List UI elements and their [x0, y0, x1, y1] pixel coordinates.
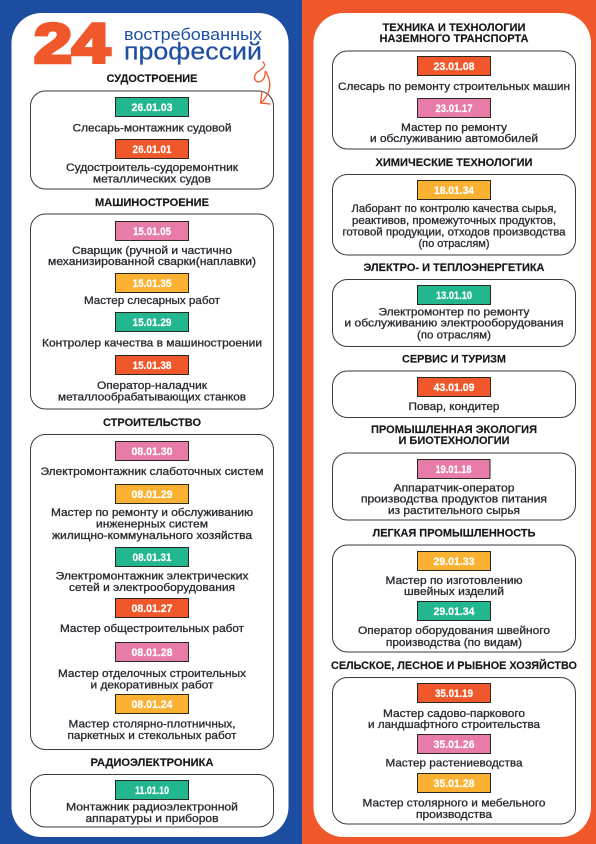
- profession: [66, 162, 238, 186]
- profession: Судостроитель-судоремонтник: [66, 162, 238, 174]
- profession: сетей и электрооборудования: [69, 582, 235, 594]
- profession: [368, 708, 540, 731]
- profession: и обслуживанию автомобилей: [370, 133, 538, 145]
- heading: ecology and biotechnology: [371, 424, 537, 447]
- code 18.01.34: 18.01.34: [434, 185, 475, 197]
- profession: Сварщик (ручной и частично: [72, 245, 232, 257]
- panel: agriculture, forestry and fisheries: [332, 678, 576, 824]
- code 29.01.34: 29.01.34: [434, 606, 475, 618]
- profession: механизированной сварки(наплавки): [48, 256, 256, 268]
- code 35.01.26: [418, 734, 490, 754]
- title line 2: профессий: [124, 38, 262, 66]
- heading: chemical technologies: ХИМИЧЕСКИЕ ТЕХНОЛОГИИ: [376, 157, 533, 169]
- profession: Мастер по ремонту: [401, 122, 508, 134]
- code 35.01.28: [418, 774, 490, 792]
- code 23.01.17: 23.01.17: [436, 103, 472, 115]
- profession: [66, 802, 238, 825]
- profession: Мастер садово-паркового: [383, 708, 525, 720]
- profession: металлических судов: [93, 174, 211, 186]
- profession: и декоративных работ: [90, 680, 214, 692]
- profession: Слесарь-монтажник судовой: [72, 122, 232, 134]
- code 15.01.05: [116, 222, 188, 240]
- code 11.01.10: 11.01.10: [135, 785, 169, 797]
- heading: construction: СТРОИТЕЛЬСТВО: [103, 417, 201, 429]
- code 35.01.26: 35.01.26: [434, 739, 474, 751]
- code 26.01.03: [116, 98, 188, 116]
- profession: [58, 380, 246, 404]
- code 13.01.10: 13.01.10: [436, 290, 472, 302]
- heading: light industry: ЛЕГКАЯ ПРОМЫШЛЕННОСТЬ: [372, 528, 536, 540]
- profession: Мастер растениеводства: [386, 758, 522, 770]
- code 26.01.01: 26.01.01: [132, 144, 172, 156]
- profession: [48, 245, 256, 268]
- code 23.01.17: [418, 98, 490, 118]
- code 15.01.35: 15.01.35: [132, 278, 172, 290]
- profession: [370, 122, 538, 145]
- code 13.01.10: [418, 286, 490, 304]
- code 08.01.27: [116, 598, 188, 618]
- icon: curly arrow: [255, 62, 270, 104]
- title: [34, 11, 263, 74]
- profession: Мастер по ремонту и обслуживанию: [51, 507, 253, 519]
- code 35.01.28: 35.01.28: [434, 778, 474, 790]
- code 08.01.29: [116, 484, 188, 504]
- code 08.01.27: 08.01.27: [132, 603, 172, 615]
- profession: Мастер общестроительных работ: [60, 623, 244, 635]
- profession: Оператор-наладчик: [97, 380, 207, 392]
- profession: производства: [416, 809, 492, 821]
- panel: shipbuilding: [30, 91, 274, 189]
- profession: инженерных систем: [96, 518, 208, 530]
- code 19.01.18: [418, 460, 490, 478]
- code 35.01.19: 35.01.19: [435, 688, 473, 700]
- heading: shipbuilding: СУДОСТРОЕНИЕ: [106, 73, 198, 85]
- code 08.01.31: [116, 548, 188, 566]
- panel: machine building: [30, 214, 274, 409]
- code 26.01.01: [116, 140, 188, 158]
- profession: готовой продукции, отходов производства: [342, 226, 566, 238]
- profession: реактивов, промежуточных продуктов,: [352, 215, 556, 227]
- code 08.01.24: [116, 694, 188, 714]
- code 15.01.38: 15.01.38: [132, 360, 172, 372]
- heading: ground transport: [380, 22, 529, 45]
- profession: Электромонтажник слаботочных систем: [40, 466, 264, 478]
- profession: Мастер по изготовлению: [386, 575, 522, 587]
- profession: Слесарь по ремонту строительных машин: [338, 81, 570, 93]
- profession: [51, 507, 253, 542]
- code 15.01.35: [116, 274, 188, 292]
- profession: [342, 203, 566, 250]
- code 08.01.28: 08.01.28: [132, 647, 172, 659]
- panel: radioelectronics: [30, 774, 274, 827]
- code 43.01.09: [418, 378, 490, 396]
- code 29.01.33: 29.01.33: [434, 556, 474, 568]
- heading: ecology and biotechnology: ПРОМЫШЛЕННАЯ ЭКОЛОГИЯ: [371, 424, 537, 436]
- panel: chemical technologies: [332, 174, 576, 255]
- profession: металлообрабатывающих станков: [58, 392, 246, 404]
- code 08.01.30: [116, 442, 188, 460]
- heading: ground transport: НАЗЕМНОГО ТРАНСПОРТА: [380, 33, 529, 45]
- profession: [361, 482, 547, 517]
- panel: ecology and biotechnology: [332, 453, 576, 520]
- profession: жилищно-коммунального хозяйства: [52, 530, 252, 542]
- profession: Лаборант по контролю качества сырья,: [352, 203, 556, 215]
- profession: Оператор оборудования швейного: [358, 625, 550, 637]
- profession: (по отраслям): [417, 330, 491, 342]
- panel: left column: [12, 11, 288, 837]
- profession: Мастер отделочных строительных: [58, 668, 247, 680]
- code 19.01.18: 19.01.18: [436, 464, 472, 476]
- profession: Мастер слесарных работ: [84, 295, 220, 307]
- profession: Электромонтер по ремонту: [378, 306, 530, 318]
- profession: [68, 718, 237, 742]
- code 35.01.19: [418, 684, 490, 702]
- profession: (по отраслям): [418, 238, 490, 250]
- panel: light industry: [332, 545, 576, 652]
- code 23.01.08: 23.01.08: [434, 61, 474, 73]
- profession: [344, 306, 564, 342]
- profession: Электромонтажник электрических: [56, 570, 249, 582]
- profession: производства (по видам): [386, 637, 522, 649]
- panel: right column: [314, 13, 591, 837]
- code 15.01.38: [116, 356, 188, 374]
- code 15.01.29: [116, 312, 188, 332]
- profession: [58, 668, 247, 692]
- code 15.01.29: 15.01.29: [132, 317, 172, 329]
- panel: service and tourism: [332, 371, 576, 418]
- profession: паркетных и стекольных работ: [68, 730, 237, 742]
- title line 1: востребованных: [124, 25, 263, 44]
- profession: и ландшафтного строительства: [368, 719, 540, 731]
- code 29.01.34: [418, 602, 490, 620]
- profession: из растительного сырья: [388, 505, 520, 517]
- heading: ground transport: ТЕХНИКА И ТЕХНОЛОГИИ: [382, 22, 526, 34]
- profession: производства продуктов питания: [361, 494, 547, 506]
- code 29.01.33: [418, 552, 490, 570]
- code 43.01.09: 43.01.09: [434, 382, 474, 394]
- code 26.01.03: 26.01.03: [132, 102, 172, 114]
- code 18.01.34: [418, 180, 490, 200]
- profession: [56, 570, 249, 594]
- code 08.01.28: [116, 642, 188, 662]
- profession: Повар, кондитер: [408, 401, 500, 413]
- panel: ground transport: [332, 51, 576, 149]
- profession: и обслуживанию электрооборудования: [344, 318, 564, 330]
- profession: аппаратуры и приборов: [86, 813, 219, 825]
- profession: [358, 625, 550, 649]
- heading: power engineering: ЭЛЕКТРО- И ТЕПЛОЭНЕРГЕТИКА: [364, 262, 545, 274]
- heading: agriculture, forestry and fisheries: СЕЛЬСКОЕ, ЛЕСНОЕ И РЫБНОЕ ХОЗЯЙСТВО: [331, 659, 577, 672]
- panel: construction: [30, 434, 274, 750]
- title number 24: 24: [34, 11, 110, 74]
- heading: radioelectronics: РАДИОЭЛЕКТРОНИКА: [90, 757, 214, 769]
- profession: Аппаратчик-оператор: [394, 482, 514, 494]
- code 08.01.31: 08.01.31: [132, 552, 172, 564]
- heading: service and tourism: СЕРВИС И ТУРИЗМ: [402, 354, 506, 366]
- profession: швейных изделий: [404, 586, 504, 598]
- heading: ecology and biotechnology: И БИОТЕХНОЛОГИИ: [398, 435, 510, 447]
- profession: Монтажник радиоэлектронной: [66, 802, 238, 814]
- code 15.01.05: 15.01.05: [133, 226, 172, 238]
- heading: machine building: МАШИНОСТРОЕНИЕ: [95, 197, 209, 209]
- profession: Мастер столярного и мебельного: [362, 798, 546, 810]
- profession: [362, 798, 546, 821]
- profession: Контролер качества в машиностроении: [42, 338, 262, 350]
- code 08.01.29: 08.01.29: [132, 489, 172, 501]
- code 11.01.10: [116, 780, 188, 800]
- panel: power engineering: [332, 280, 576, 346]
- orange background: [302, 0, 596, 844]
- profession: Мастер столярно-плотничных,: [68, 718, 236, 730]
- code 08.01.24: 08.01.24: [132, 699, 173, 711]
- code 08.01.30: 08.01.30: [132, 446, 172, 458]
- blue background: [0, 0, 302, 844]
- profession: [386, 575, 522, 598]
- code 23.01.08: [418, 56, 490, 76]
